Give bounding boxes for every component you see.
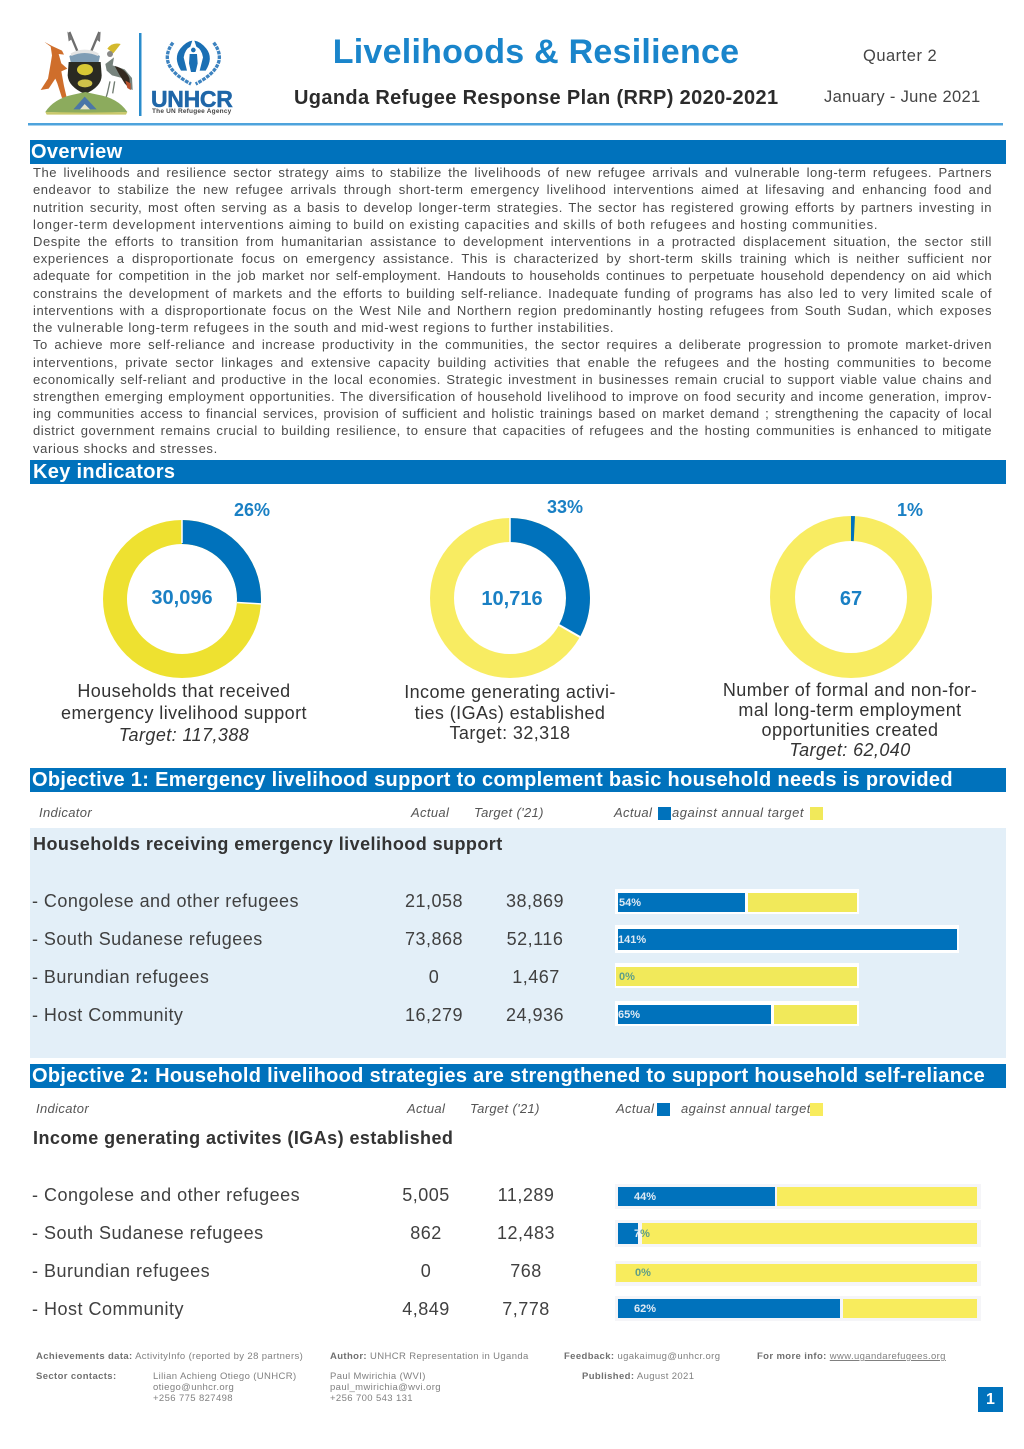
subtitle: Uganda Refugee Response Plan (RRP) 2020-2021 (294, 87, 778, 109)
row: South Sudanese: 73,868 (405, 929, 463, 949)
row: Host community: 16,279 (405, 1005, 463, 1025)
donut chart (430, 518, 590, 678)
legend: actual swatch (658, 807, 671, 820)
donut chart (103, 520, 261, 678)
text block: overview: Despite the efforts to transition from humanitarian assistance to development interventions in a protracted displacement situation, the sector still (33, 234, 992, 249)
legend: target swatch (810, 1103, 823, 1116)
row: Host community: 24,936 (506, 1005, 564, 1025)
divider line (139, 33, 142, 116)
logo wordmark: UNHCR (151, 86, 233, 112)
row: Host community (32, 1001, 859, 1026)
heading: key indicators (30, 460, 1006, 484)
row: South Sudanese: 862 (410, 1223, 442, 1243)
description: Target: 117,388 (119, 725, 249, 745)
percent label: 33% (547, 497, 583, 517)
panel: objective 2 table (32, 1184, 981, 1321)
period: January - June 2021 (824, 88, 981, 106)
table header: objective 2: Actual (616, 1101, 654, 1116)
sub heading: Households receiving emergency livelihood support (33, 834, 503, 854)
row: Congolese (32, 889, 859, 914)
bar (615, 1261, 981, 1286)
footer: Published: August 2021 (582, 1371, 694, 1382)
footer (36, 1351, 946, 1404)
table header: objective 1: Actual (614, 805, 652, 820)
description: Number of formal and non-for- (723, 680, 977, 700)
description: mal long-term employment (738, 700, 962, 720)
row: Burundian (32, 963, 859, 988)
text block: overview: adequate for competition in the job market nor self-employment. Handouts to households continues to perpetuate household dependency on aid which (33, 268, 992, 283)
row: Host community: 62% (634, 1303, 656, 1315)
row: Burundian: - Burundian refugees (32, 967, 209, 987)
row: South Sudanese: - South Sudanese refugees (32, 1223, 264, 1243)
table header: objective 2: against annual target (681, 1101, 811, 1116)
bar (615, 963, 859, 988)
description: Income generating activi- (404, 682, 616, 702)
row: Congolese: 11,289 (498, 1185, 554, 1205)
row: Burundian: 1,467 (512, 967, 560, 987)
description: ties (IGAs) established (415, 702, 605, 722)
row: Host community: 7,778 (502, 1299, 550, 1319)
logo tagline: The UN Refugee Agency (152, 108, 231, 115)
bar (615, 1296, 981, 1321)
row: Host community: - Host Community (32, 1299, 184, 1319)
description: opportunities created (762, 720, 938, 740)
bar (615, 925, 959, 953)
text block: overview: district government remains crucial to building resilience, to ensure that capacities of refugees and the hosting communities is enhanced to mitigate (33, 423, 992, 438)
header rule (28, 123, 1003, 126)
row: South Sudanese: 52,116 (507, 929, 563, 949)
footer: Achievements data: ActivityInfo (reported by 28 partners) (36, 1351, 303, 1362)
sub heading: objective 2: Income generating activites (IGAs) established (33, 1128, 453, 1148)
legend: actual swatch (657, 1103, 670, 1116)
page number: 1 (986, 1391, 995, 1408)
text block: overview: various shocks and stresses. (33, 441, 218, 456)
row: South Sudanese (32, 925, 959, 953)
description (404, 682, 616, 743)
row: Burundian (32, 1261, 981, 1286)
centre value: 67 (840, 588, 862, 610)
text block: overview: strengthen emerging employment opportunities. The diversification of household livelihood to improve on food security and income generation, improv- (33, 389, 992, 404)
table header: objective 1 (39, 805, 823, 820)
row: Congolese: - Congolese and other refugees (32, 1185, 300, 1205)
row: Congolese: 5,005 (402, 1185, 450, 1205)
legend: target swatch (810, 807, 823, 820)
heading: objective 2: Objective 2: Household livelihood strategies are strengthened to support household self-reliance (32, 1065, 985, 1087)
row: South Sudanese: - South Sudanese refugees (32, 929, 263, 949)
bar (615, 1220, 981, 1247)
table header: objective 1: Indicator (39, 805, 92, 820)
donut chart (770, 516, 932, 678)
row: Congolese: 54% (619, 897, 641, 909)
bar (615, 1001, 859, 1026)
description: emergency livelihood support (61, 703, 307, 723)
description (723, 680, 977, 760)
panel: indicator IGAs (404, 497, 616, 743)
percent label: 1% (897, 500, 923, 520)
text block: overview: constrains the development of markets and the efforts to building self-reliance. Inadequate funding of programs has also led to very limited scale of (33, 286, 992, 301)
row: South Sudanese (32, 1220, 981, 1247)
footer: +256 775 827498 (153, 1393, 233, 1404)
footer: +256 700 543 131 (330, 1393, 413, 1404)
row: Congolese: 38,869 (506, 891, 564, 911)
panel: objective 1 table (30, 828, 1006, 1058)
description: Target: 32,318 (450, 723, 570, 743)
footer: Paul Mwirichia (WVI) (330, 1371, 426, 1382)
description: Target: 62,040 (789, 740, 911, 760)
footer: Lilian Achieng Otiego (UNHCR) (153, 1371, 297, 1382)
bar (615, 889, 859, 914)
table header: objective 1: against annual target (672, 805, 804, 820)
table header: objective 2: Indicator (36, 1101, 89, 1116)
row: South Sudanese: 7% (634, 1228, 650, 1240)
text block: overview: the vulnerable long-term refugees in the south and mid-west regions to further instabilities. (33, 320, 614, 335)
heading: key indicators: Key indicators (33, 461, 175, 483)
row: Host community (32, 1296, 981, 1321)
panel: indicator households (61, 500, 307, 745)
centre value: 10,716 (481, 588, 543, 610)
footer: paul_mwirichia@wvi.org (330, 1382, 441, 1393)
row: Congolese: - Congolese and other refugees (32, 891, 299, 911)
icon: Uganda coat of arms (40, 32, 133, 115)
row: Burundian: 768 (510, 1261, 542, 1281)
footer: Sector contacts: (36, 1371, 117, 1382)
text block: overview: The livelihoods and resilience sector strategy aims to stabilize the livelihoods of new refugee arrivals and vulnerable long-term refugees. Partners (33, 165, 992, 180)
row: South Sudanese: 12,483 (497, 1223, 555, 1243)
row: Burundian: 0 (429, 967, 439, 987)
quarter: Quarter 2 (863, 47, 937, 65)
table header: objective 2 (36, 1101, 823, 1116)
text block: overview: endeavor to stabilize the new refugee arrivals through short-term emergency livelihood interventions aimed at lifesaving and enhancing food and (33, 182, 992, 197)
heading: objective 1: Objective 1: Emergency livelihood support to complement basic household needs is provided (32, 769, 953, 791)
row: Burundian: 0% (635, 1267, 651, 1279)
table header: objective 2: Target ('21) (470, 1101, 540, 1116)
text block: overview (33, 165, 992, 456)
row: South Sudanese: 141% (618, 934, 646, 946)
text block: overview: economically self-reliant and productive in the local economies. Strategic investment in businesses remain crucial to support viable value chains and (33, 372, 992, 387)
row: Burundian: 0% (619, 971, 635, 983)
footer: For more info: www.ugandarefugees.org (757, 1351, 946, 1362)
centre value: 30,096 (151, 587, 213, 609)
row: Burundian: 0 (421, 1261, 431, 1281)
text block: overview: To achieve more self-reliance and increase productivity in the communities, the sector requires a deliberate progression to promote market-driven (33, 337, 992, 352)
text block: overview: experiences a disproportionate focus on emergency assistance. This is characterized by short-term skills training which is neither sufficient nor (33, 251, 992, 266)
description: Households that received (77, 681, 291, 701)
row: Burundian: - Burundian refugees (32, 1261, 210, 1281)
percent label: 26% (234, 500, 270, 520)
table header: objective 1: Actual (411, 805, 449, 820)
heading: overview (30, 140, 1006, 164)
bar (615, 1184, 981, 1209)
row: Congolese: 44% (634, 1191, 656, 1203)
text block: overview: nutrition security, most often serving as a basis to develop longer-term strategies. The sector has registered growing efforts by partners investing in (33, 200, 992, 215)
footer: otiego@unhcr.org (153, 1382, 234, 1393)
icon: UNHCR logo (151, 40, 233, 115)
text block: overview: interventions, private sector linkages and extensive capacity building activities that enable the refugees and the hosting communities to become (33, 355, 992, 370)
row: Host community: - Host Community (32, 1005, 183, 1025)
row: Host community: 4,849 (402, 1299, 450, 1319)
row: Congolese: 21,058 (405, 891, 463, 911)
text block: overview: interventions with a disproportionate focus on the West Nile and Northern region predominantly hosting refugees from South Sudan, which exposes (33, 303, 992, 318)
title: Livelihoods & Resilience (333, 33, 739, 71)
heading: overview: Overview (31, 141, 123, 163)
table header: objective 1: Target ('21) (474, 805, 544, 820)
text block: overview: ing communities access to financial services, provision of sufficient and holistic trainings based on market demand ; strengthening the capacity of local (33, 406, 992, 421)
table header: objective 2: Actual (407, 1101, 445, 1116)
description (61, 681, 307, 745)
row: Congolese (32, 1184, 981, 1209)
page number (978, 1387, 1003, 1412)
header (28, 32, 1003, 126)
row: Host community: 65% (618, 1009, 640, 1021)
footer: Feedback: ugakaimug@unhcr.org (564, 1351, 720, 1362)
text block: overview: longer-term development interventions aiming to build on existing capacities and skills of both refugees and hosting communities. (33, 217, 878, 232)
footer: Author: UNHCR Representation in Uganda (330, 1351, 529, 1362)
panel: indicator employment (723, 500, 977, 760)
